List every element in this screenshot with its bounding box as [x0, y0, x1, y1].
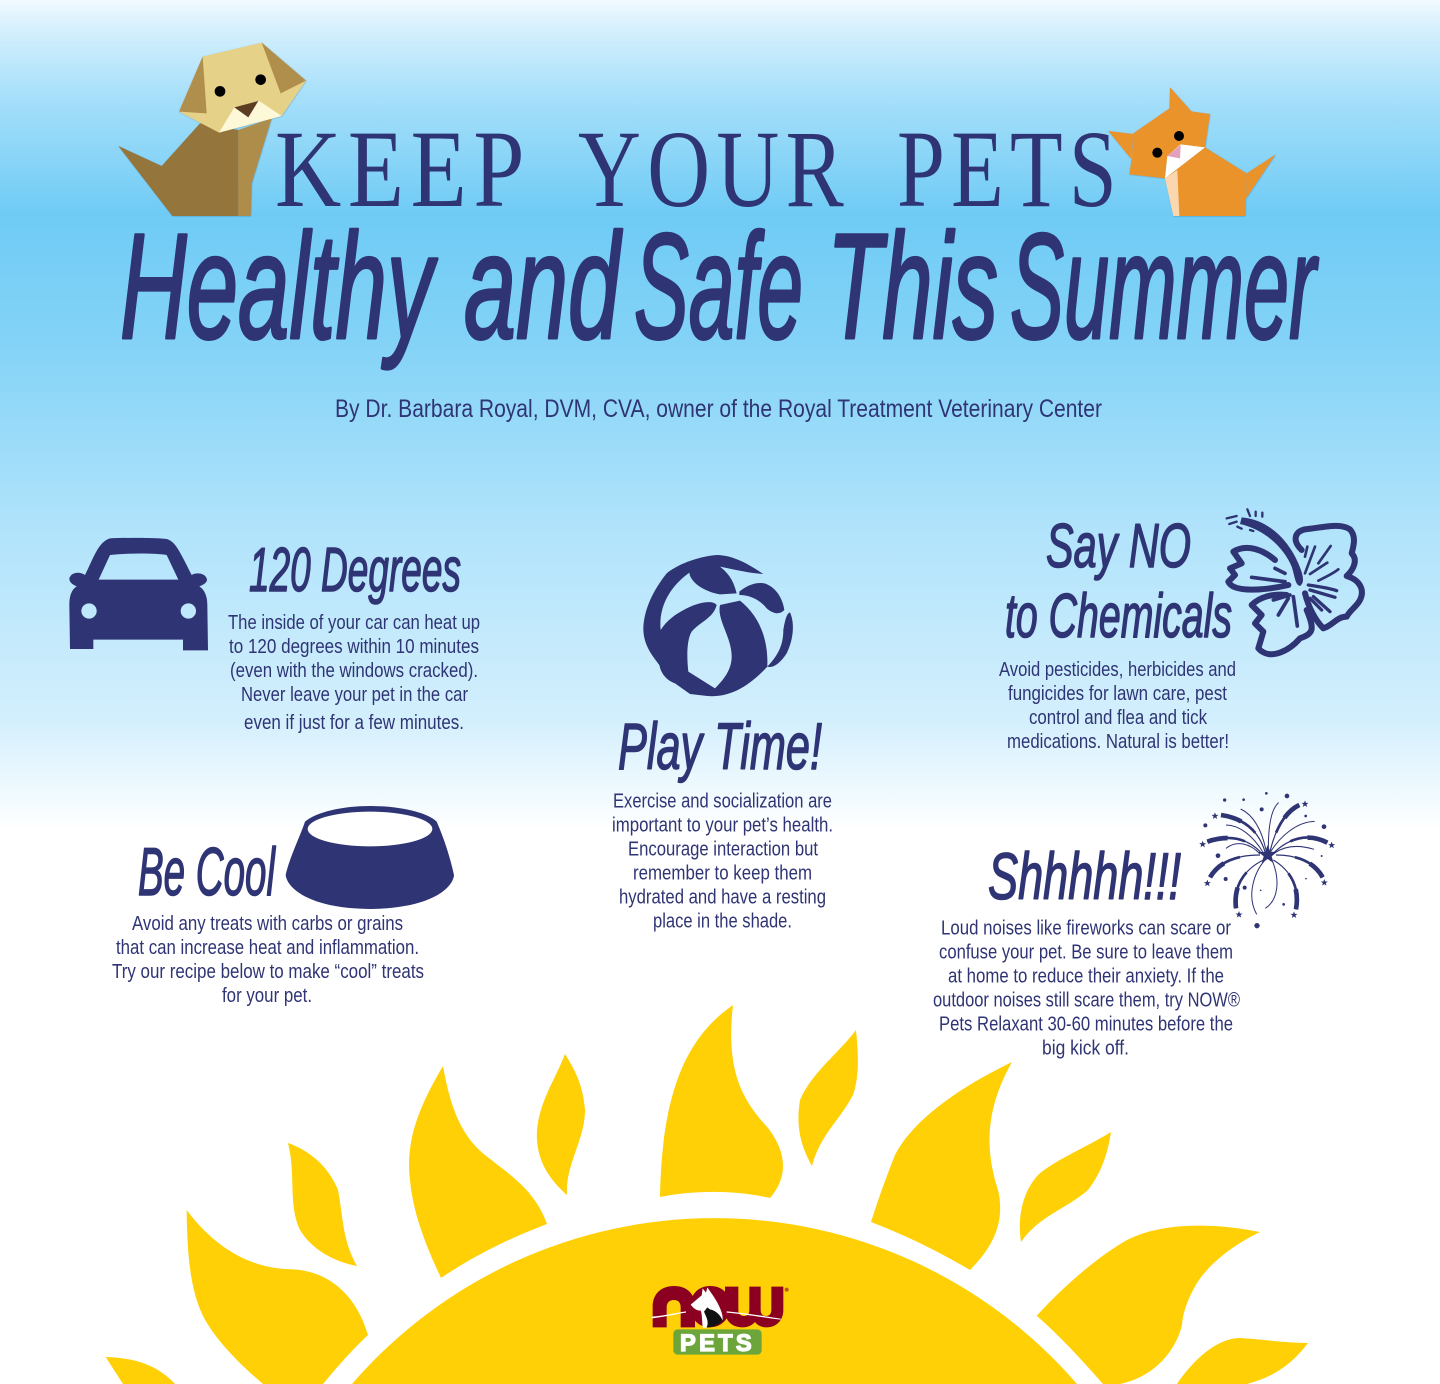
panel: play time	[612, 555, 833, 932]
panel: be cool	[112, 806, 454, 1007]
text: 120 degrees body	[228, 612, 480, 734]
icon: car	[69, 538, 208, 650]
text: chemicals body	[999, 659, 1236, 753]
icon: beach ball	[643, 555, 793, 696]
heading: Say NO to Chemicals	[1005, 512, 1232, 651]
text: chemicals body: medications. Natural is better!	[1007, 731, 1229, 753]
logo: NOW Pets: PETS	[680, 1331, 752, 1357]
title: YOUR	[578, 108, 850, 230]
icon: hibiscus flower	[1227, 509, 1362, 654]
text: shhhhh body: Loud noises like fireworks can scare or	[941, 918, 1231, 940]
heading: Say NO to Chemicals: to Chemicals	[1005, 582, 1232, 651]
title: This	[827, 202, 998, 370]
text: 120 degrees body: to 120 degrees within 10 minutes	[229, 636, 479, 658]
text: chemicals body: fungicides for lawn care, pest	[1008, 683, 1227, 705]
text: shhhhh body: Pets Relaxant 30-60 minutes before the	[939, 1014, 1233, 1036]
byline: By Dr. Barbara Royal, DVM, CVA, owner of the Royal Treatment Veterinary Center	[335, 395, 1102, 423]
heading: Play Time: Play Time!	[618, 709, 822, 783]
text: 120 degrees body: The inside of your car can heat up	[228, 612, 480, 634]
text: shhhhh body: outdoor noises still scare them, try NOW®	[933, 990, 1240, 1012]
illustration: origami cat	[1108, 87, 1276, 216]
panel: 120 degrees	[69, 536, 480, 734]
text: play time body: important to your pet’s health.	[612, 814, 833, 836]
text: play time body: Encourage interaction but	[628, 838, 818, 860]
panel: shhhhh	[933, 792, 1335, 1060]
text: chemicals body: Avoid pesticides, herbicides and	[999, 659, 1236, 681]
icon: pet bowl	[286, 806, 454, 909]
heading: 120 Degrees: 120 Degrees	[249, 536, 461, 605]
heading: Be Cool: Be Cool	[138, 834, 276, 910]
text: 120 degrees body: even if just for a few minutes.	[244, 712, 464, 734]
title: Healthy	[120, 202, 438, 370]
illustration: origami dog	[118, 43, 306, 216]
text: shhhhh body: at home to reduce their anxiety. If the	[948, 966, 1224, 988]
title	[120, 108, 1319, 370]
text: shhhhh body	[933, 918, 1240, 1060]
icon: fireworks	[1199, 792, 1335, 928]
panel: say no to chemicals	[999, 509, 1362, 753]
text: play time body	[612, 790, 833, 932]
title: PETS	[897, 108, 1123, 230]
text: play time body: remember to keep them	[633, 862, 812, 884]
text: chemicals body: control and flea and tick	[1029, 707, 1208, 729]
text: play time body: place in the shade.	[653, 910, 792, 932]
logo: NOW Pets	[652, 1286, 789, 1357]
title: Safe	[634, 202, 803, 370]
text: shhhhh body: confuse your pet. Be sure to leave them	[939, 942, 1233, 964]
text: shhhhh body: big kick off.	[1042, 1038, 1129, 1060]
text: be cool body: Avoid any treats with carbs or grains	[132, 913, 403, 935]
sun	[106, 1005, 1308, 1384]
text: play time body: hydrated and have a resting	[619, 886, 826, 908]
title: and	[464, 202, 623, 370]
title: KEEP	[275, 108, 531, 230]
text: be cool body: for your pet.	[222, 985, 312, 1007]
text: be cool body: that can increase heat and inflammation.	[116, 937, 419, 959]
heading: Say NO to Chemicals: Say NO	[1046, 512, 1191, 581]
text: play time body: Exercise and socialization are	[613, 790, 832, 812]
heading: Shhhhh: Shhhhh!!!	[988, 839, 1181, 913]
text: be cool body: Try our recipe below to make “cool” treats	[112, 961, 424, 983]
text: 120 degrees body: (even with the windows cracked).	[230, 660, 478, 682]
text: be cool body	[112, 913, 424, 1007]
text: 120 degrees body: Never leave your pet in the car	[241, 684, 468, 706]
